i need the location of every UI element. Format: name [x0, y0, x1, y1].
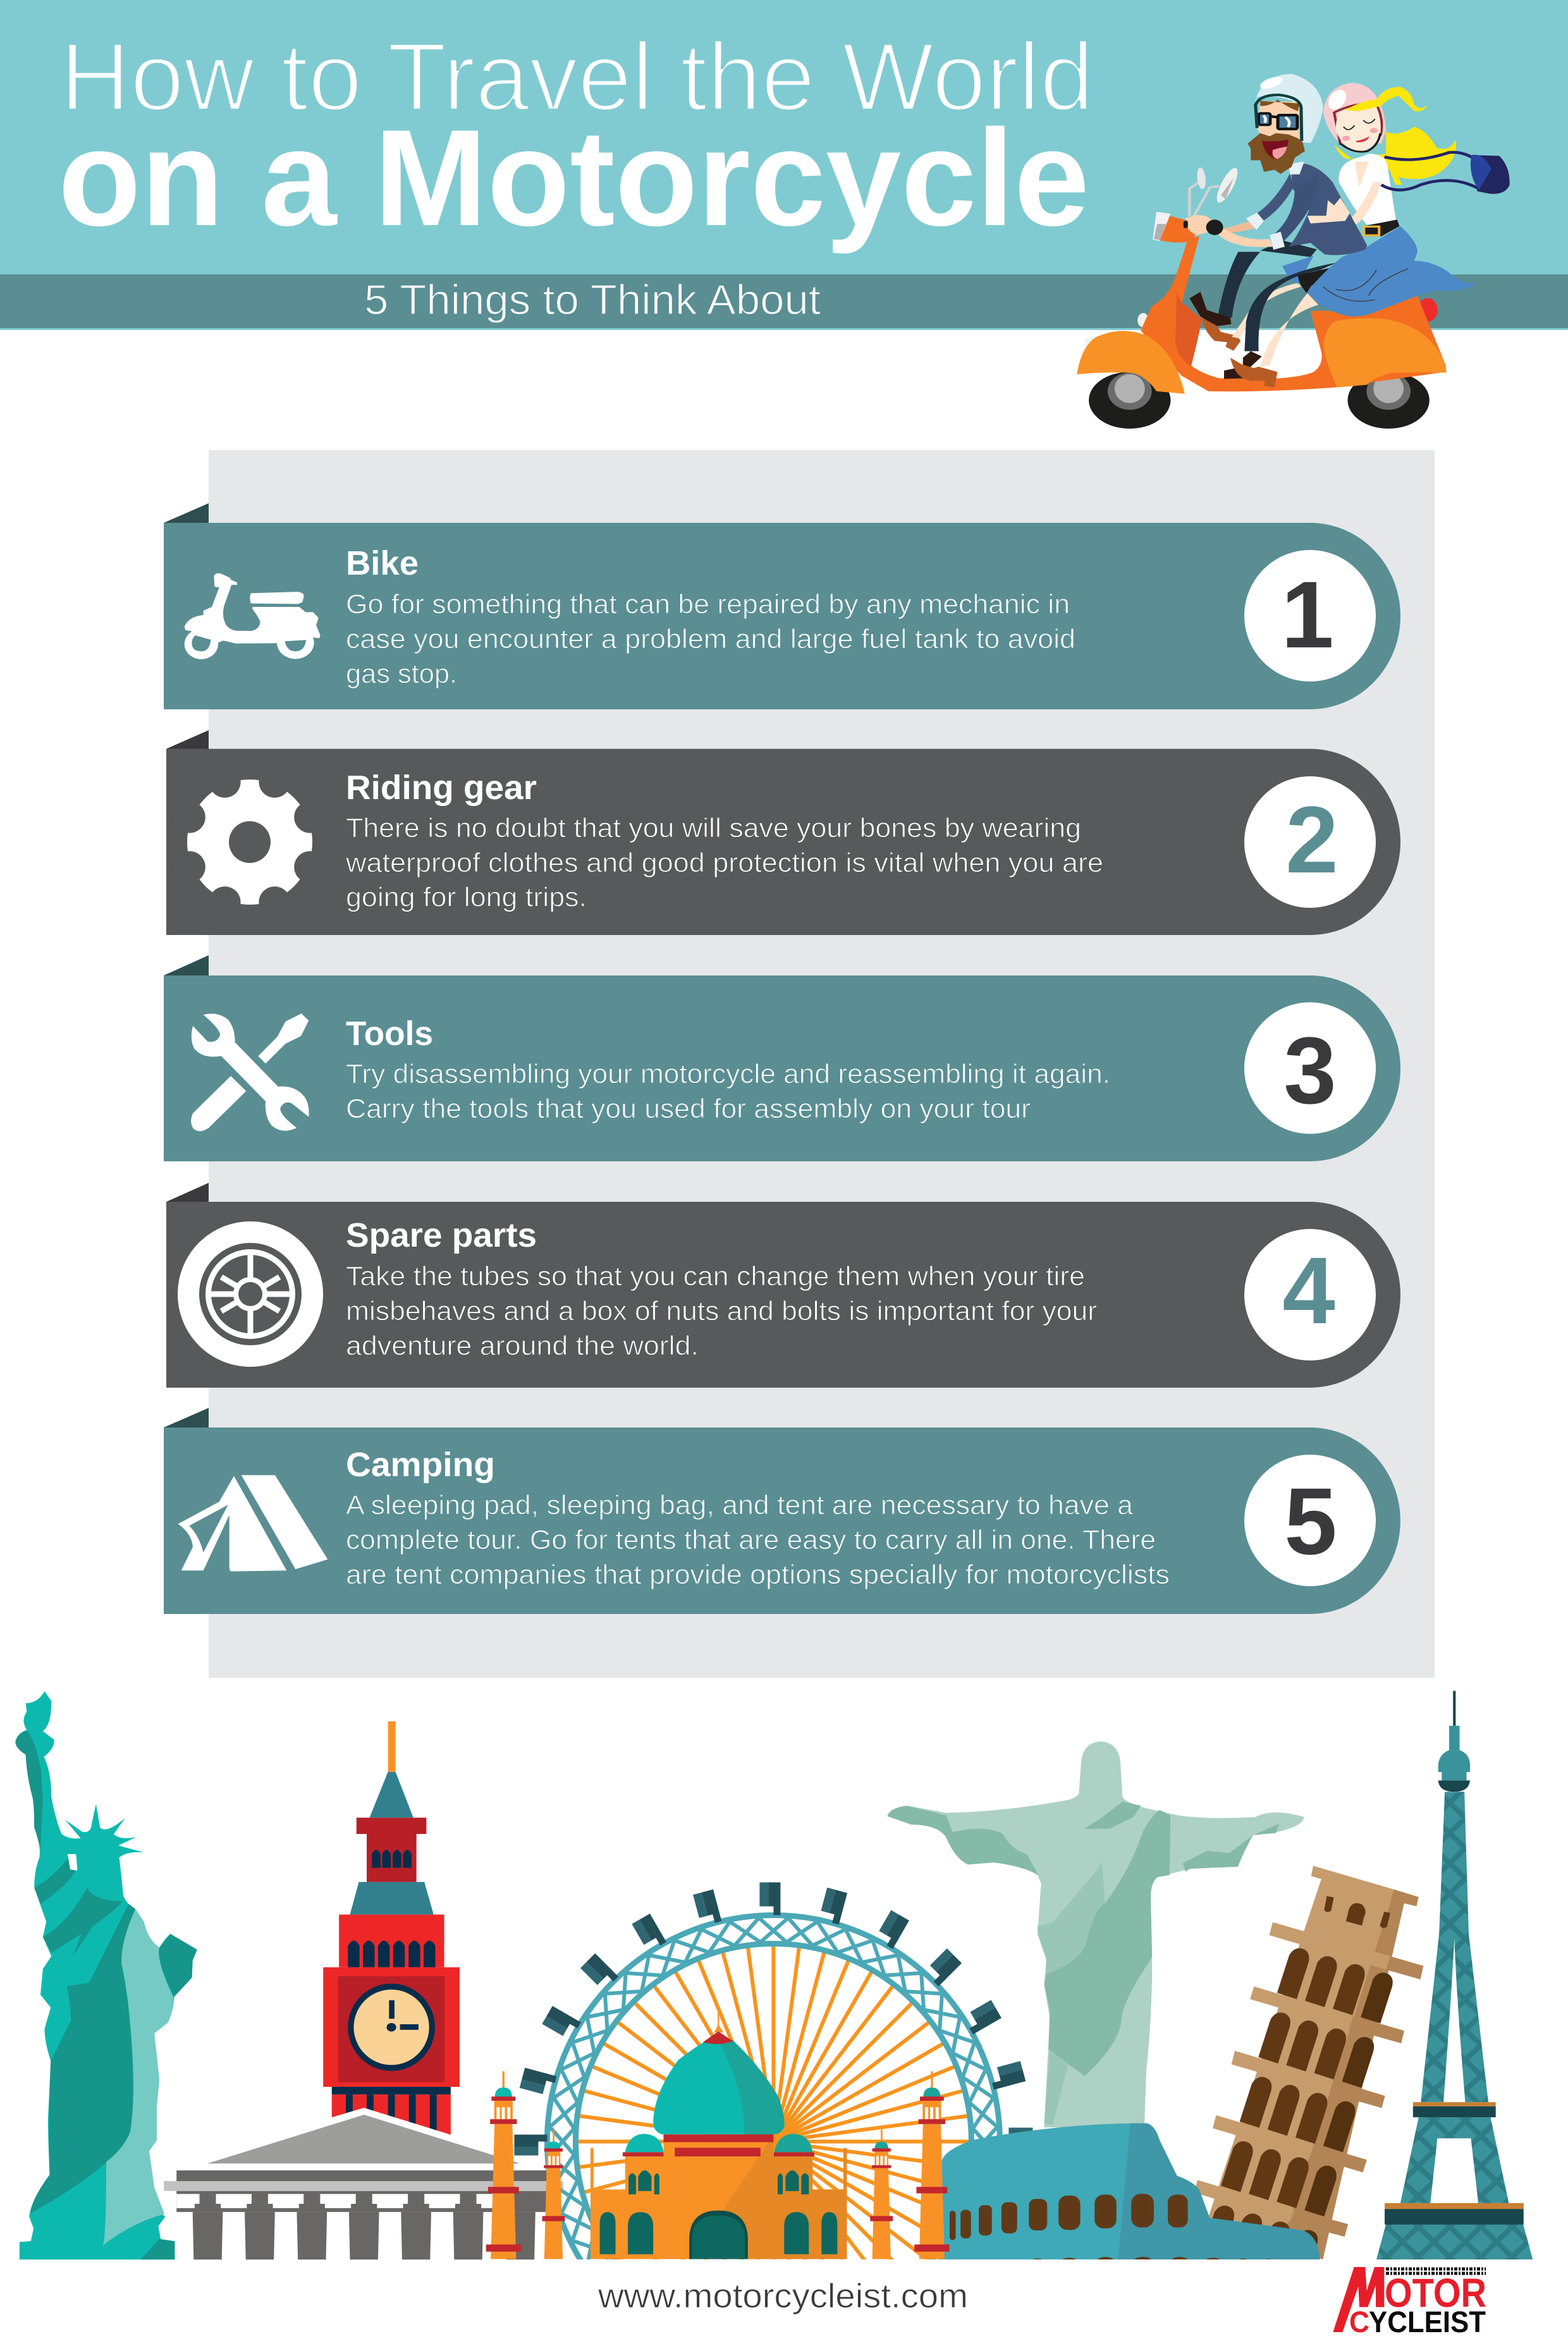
number badge 2: 2 [1285, 786, 1338, 893]
number badge 4: 4 [1282, 1237, 1335, 1343]
icon: scooter [185, 573, 321, 659]
minaret: large left [486, 2071, 521, 2259]
title line 1: How to Travel the World [60, 23, 1094, 131]
text: Camping description [346, 1490, 1170, 1590]
landmark: Leaning Tower of Pisa [1194, 1866, 1423, 2281]
number badge 5: 5 [1284, 1468, 1337, 1574]
website url: www.motorcycleist.com [597, 2277, 968, 2315]
landmark: Big Ben and portico [164, 1721, 563, 2259]
subtitle: 5 Things to Think About [364, 276, 821, 324]
logo: Motor Cycleist: OTOR [1385, 2270, 1486, 2316]
minaret: small left [542, 2130, 565, 2259]
text: Camping description: are tent companies that provide options specially for motorcyclists [346, 1560, 1170, 1590]
text: Tools description [346, 1059, 1110, 1124]
minaret: large right [914, 2071, 950, 2259]
landmark: London Eye ferris wheel [514, 1883, 1033, 2259]
landmark: Statue of Liberty [15, 1691, 197, 2259]
text: Tools description: Try disassembling your motorcycle and reassembling it again. [346, 1059, 1110, 1089]
landmark: Taj Mahal [591, 2012, 847, 2259]
logo: Motor Cycleist [1333, 2267, 1486, 2338]
text: Tools description: Carry the tools that you used for assembly on your tour [346, 1094, 1031, 1124]
minarets [486, 2071, 950, 2259]
text: Bike description [346, 589, 1075, 689]
text: Bike description: gas stop. [346, 659, 457, 689]
number badge 5 [1244, 1455, 1376, 1586]
wheel cabins [514, 1883, 1032, 2156]
text: Spare parts description: misbehaves and a box of nuts and bolts is important for your [346, 1296, 1097, 1326]
number badge 3 [1244, 1003, 1376, 1134]
ribbon 5: Camping [164, 1408, 1400, 1614]
number badge 1: 1 [1281, 561, 1334, 668]
number badge 1 [1244, 550, 1376, 682]
landmark: Christ the Redeemer [887, 1741, 1304, 2127]
heading: Camping: Camping [346, 1446, 495, 1484]
illustration: couple riding a scooter [1077, 74, 1510, 429]
text: Bike description: Go for something that can be repaired by any mechanic in [346, 589, 1070, 620]
ribbon 2: Riding gear [166, 730, 1400, 935]
text: Riding gear description: There is no doubt that you will save your bones by wearing [346, 813, 1081, 843]
minaret: small right [870, 2130, 893, 2259]
text: Riding gear description: going for long trips. [346, 883, 587, 913]
text: Riding gear description [345, 813, 1103, 913]
text: Camping description: complete tour. Go for tents that are easy to carry all in one. There [346, 1525, 1156, 1555]
wheel spokes [578, 1947, 969, 2259]
text: Riding gear description: waterproof clothes and good protection is vital when you are [345, 848, 1103, 878]
text: Spare parts description [346, 1261, 1097, 1361]
heading: Spare parts: Spare parts [346, 1216, 537, 1254]
heading: Tools: Tools [346, 1015, 433, 1053]
text: Camping description: A sleeping pad, sleeping bag, and tent are necessary to have a [346, 1490, 1133, 1520]
landmark: Colosseum [942, 2123, 1320, 2265]
ribbon 4: Spare parts [166, 1183, 1400, 1388]
ribbon 1: Bike [164, 503, 1400, 709]
number badge 4 [1244, 1229, 1376, 1360]
grey content panel [209, 450, 1435, 1678]
icon: wheel [178, 1221, 323, 1367]
title line 2: on a Motorcycle [58, 101, 1089, 254]
ribbon 3: Tools [164, 955, 1400, 1161]
number badge 2 [1244, 776, 1376, 908]
icon: tent [178, 1475, 328, 1572]
number badge 3: 3 [1283, 1017, 1337, 1123]
text: Spare parts description: adventure around the world. [346, 1331, 699, 1361]
heading: Bike: Bike [346, 544, 419, 582]
wheel rim lattice [544, 1912, 1003, 2259]
icon: gear [174, 766, 326, 918]
landmark: Eiffel Tower [1376, 1691, 1533, 2259]
text: Bike description: case you encounter a problem and large fuel tank to avoid [346, 624, 1075, 654]
heading: Riding gear: Riding gear [346, 769, 537, 807]
header background [0, 0, 1568, 274]
logo: Motor Cycleist: C [1349, 2305, 1369, 2338]
icon: wrench and screwdriver [191, 1013, 309, 1131]
subtitle band [0, 274, 1568, 330]
text: Spare parts description: Take the tubes so that you can change them when your tire [346, 1261, 1085, 1292]
logo: Motor Cycleist: YCLEIST [1369, 2305, 1486, 2338]
